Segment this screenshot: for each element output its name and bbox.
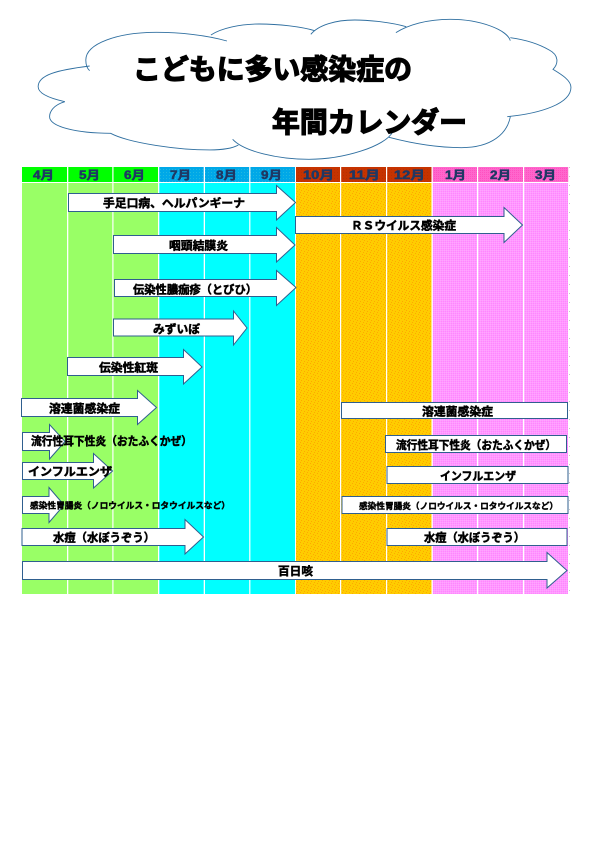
arrow: pharyngoconjunctival fever [114, 228, 295, 262]
arrow: hand-foot-mouth, herpangina: 手足口病、ヘルパンギーナ [103, 196, 245, 210]
month header row: 6月 [124, 169, 145, 182]
arrow: molluscum [114, 311, 247, 345]
bar: mumps right: 流行性耳下性炎（おたふくかぜ） [396, 438, 556, 452]
month header row: 12月 [394, 169, 425, 182]
month header row: 4月 [33, 169, 54, 182]
arrow: gastroenteritis left [22, 488, 230, 522]
month header row [22, 167, 568, 182]
cloud title banner [38, 19, 571, 159]
month header row: 11月 [349, 169, 380, 182]
arrow: influenza left [22, 454, 113, 488]
arrow: strep left [22, 390, 156, 424]
bar: gastroenteritis right [342, 496, 568, 514]
bar: chickenpox right: 水痘（水ぼうぞう） [424, 530, 525, 544]
calendar background columns [22, 167, 570, 594]
arrow: RS virus: ＲＳウイルス感染症 [351, 218, 457, 232]
arrow: mumps left [22, 424, 192, 459]
bar: strep right [342, 402, 568, 418]
bar: chickenpox right [387, 528, 567, 546]
title line 2: 年間カレンダー [272, 106, 467, 138]
arrow: impetigo: 伝染性膿痂疹（とびひ） [133, 282, 257, 296]
month header row: 8月 [216, 169, 237, 182]
bar: mumps right [386, 436, 566, 452]
arrow: chickenpox left: 水痘（水ぼうぞう） [53, 530, 155, 544]
arrow: gastroenteritis left: 感染性胃腸炎（ノロウイルス・ロタウイルスなど） [30, 500, 230, 510]
arrow: whooping cough: 百日咳 [278, 564, 314, 578]
arrow: mumps left: 流行性耳下性炎（おたふくかぜ） [31, 434, 192, 448]
month header row: 3月 [535, 169, 556, 182]
arrow: pharyngoconjunctival fever: 咽頭結膜炎 [169, 238, 229, 252]
month header row: 2月 [490, 169, 511, 182]
arrow: influenza left: インフルエンザ [28, 466, 113, 478]
month header row: 7月 [170, 169, 191, 182]
bar: influenza right: インフルエンザ [440, 470, 516, 483]
month header row: 9月 [261, 169, 282, 182]
title line 1: こどもに多い感染症の [133, 54, 412, 85]
arrow: impetigo [114, 270, 296, 306]
arrow: hand-foot-mouth, herpangina [68, 186, 296, 220]
bar: gastroenteritis right: 感染性胃腸炎（ノロウイルス・ロタウイルスなど） [359, 500, 558, 511]
month header row: 1月 [445, 169, 466, 182]
arrow: whooping cough [22, 552, 567, 588]
arrow: chickenpox left [22, 520, 204, 554]
arrow: erythema infectiosum: 伝染性紅斑 [99, 360, 159, 374]
arrow: erythema infectiosum [68, 350, 202, 384]
bar: influenza right [387, 466, 568, 484]
bar: strep right: 溶連菌感染症 [422, 404, 494, 418]
arrow: molluscum: みずいぼ [153, 322, 201, 336]
arrow: RS virus [296, 208, 522, 242]
arrow: strep left: 溶連菌感染症 [49, 402, 121, 416]
month header row: 5月 [79, 169, 100, 182]
month header row: 10月 [303, 169, 334, 182]
